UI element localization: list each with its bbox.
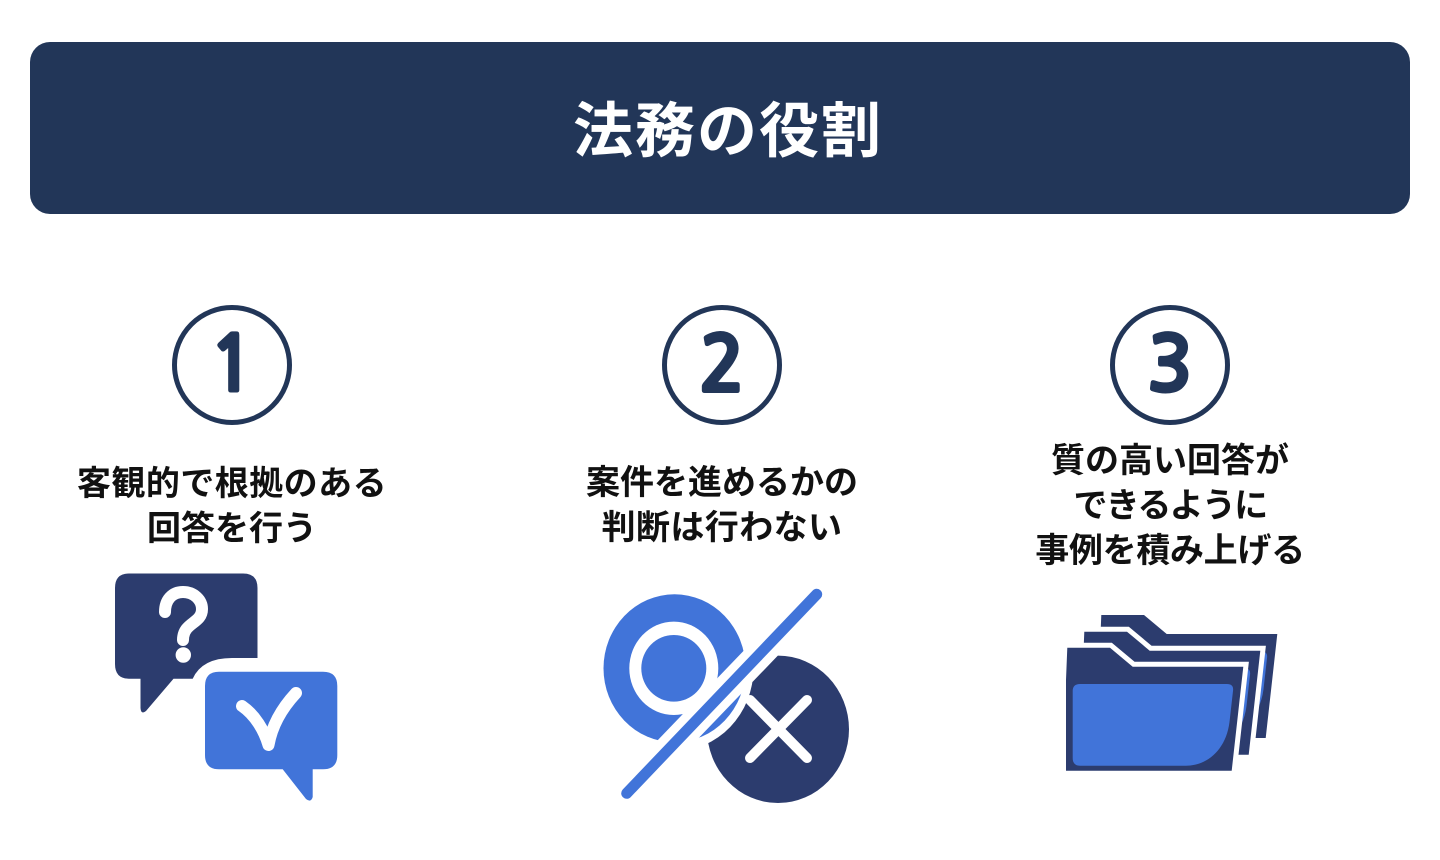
number badge 1	[172, 305, 292, 425]
text: role 1 description: 回答を行う	[147, 501, 317, 550]
number badge 2	[662, 305, 782, 425]
text: role 1 description: 客観的で根拠のある	[77, 456, 387, 505]
number badge 2: 2	[699, 328, 745, 403]
number badge 1: 1	[209, 328, 255, 403]
panel: role 2	[586, 305, 858, 803]
number badge 3: 3	[1147, 328, 1193, 403]
header banner	[30, 42, 1410, 214]
text: role 3 description: 事例を積み上げる	[1035, 523, 1305, 572]
panel: role 3	[1035, 305, 1305, 771]
text: role 3 description	[1035, 433, 1305, 572]
title: 法務の役割	[573, 83, 883, 170]
icon: circle and cross with diagonal slash	[604, 588, 849, 803]
text: role 3 description: 質の高い回答が	[1051, 433, 1289, 482]
number badge 3	[1110, 305, 1230, 425]
text: role 2 description	[586, 455, 858, 549]
text: role 2 description: 判断は行わない	[602, 500, 842, 549]
text: role 3 description: できるように	[1073, 478, 1267, 527]
icon: stacked folders	[1066, 615, 1278, 771]
text: role 1 description	[77, 456, 387, 550]
panel: role 1	[77, 305, 387, 801]
text: role 2 description: 案件を進めるかの	[586, 455, 858, 504]
icon: question and check speech bubbles	[115, 574, 338, 801]
